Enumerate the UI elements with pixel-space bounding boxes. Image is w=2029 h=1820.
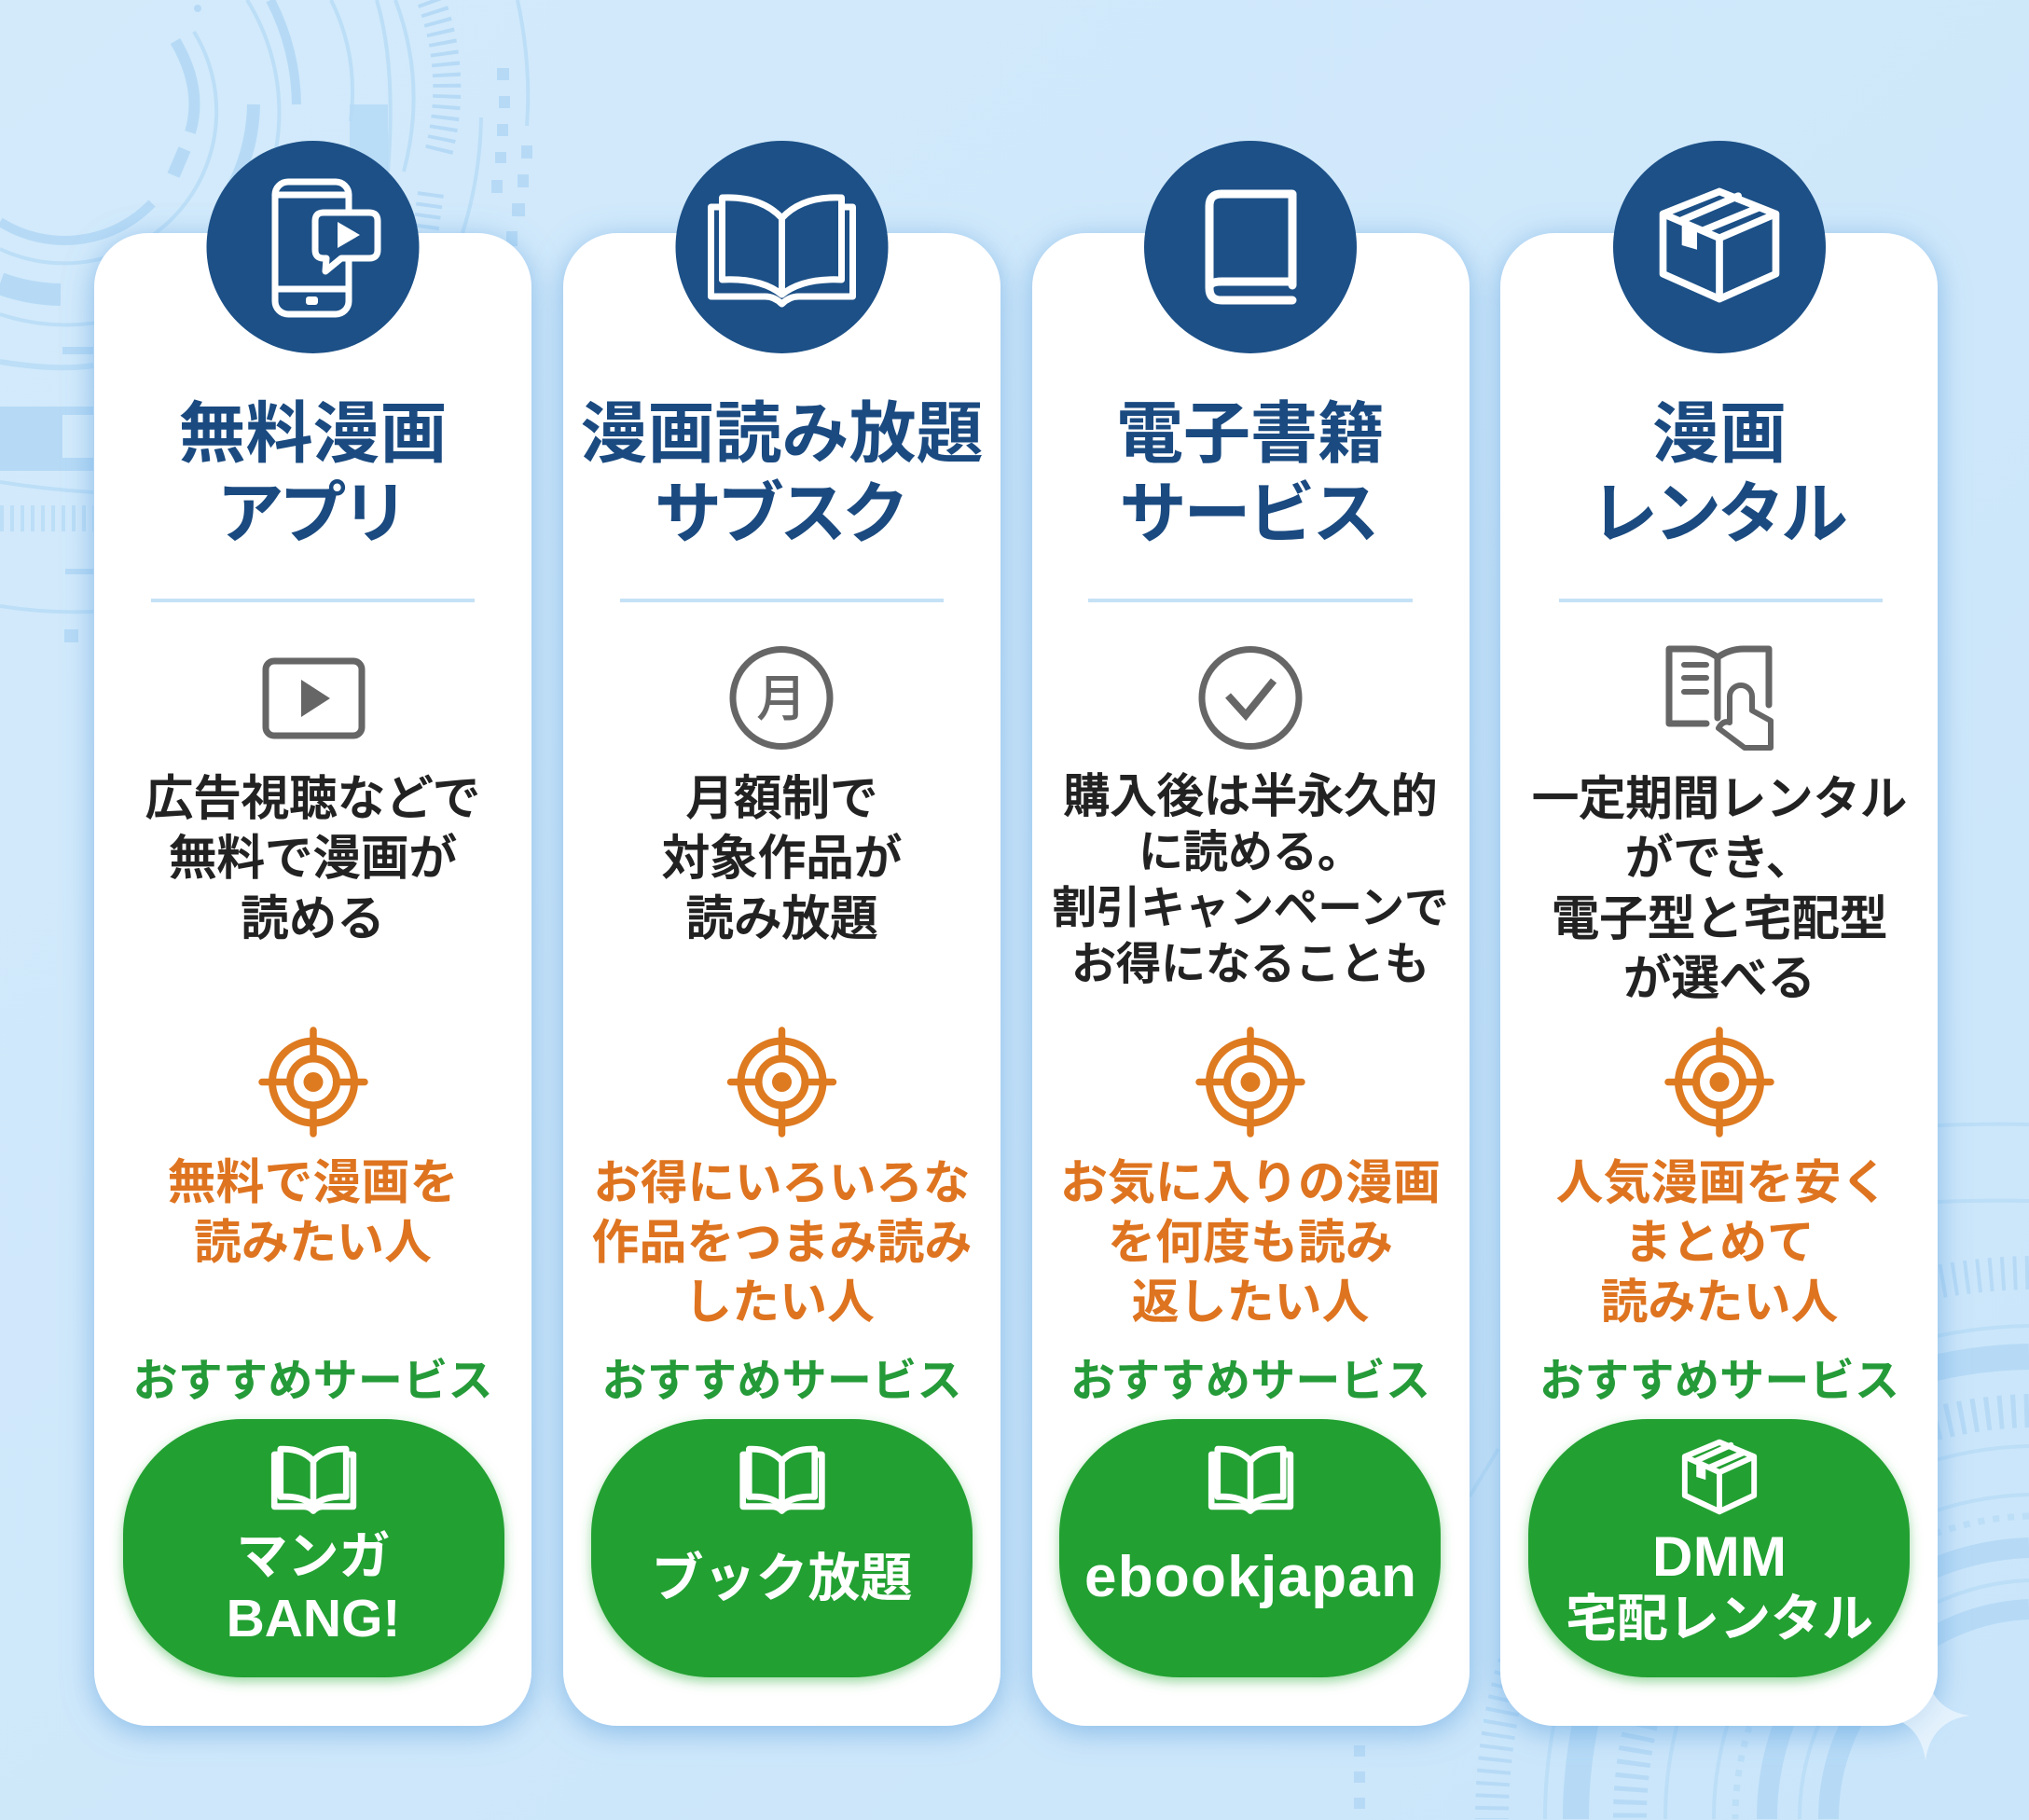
description: 読める <box>241 891 385 945</box>
heading: 電子書籍 <box>1116 397 1385 472</box>
panel: 漫画読み放題サブスク <box>563 141 1001 1726</box>
icon: sparkle <box>1882 1670 1969 1760</box>
heading <box>178 397 448 552</box>
recommended label: おすすめサービス <box>132 1357 492 1406</box>
description <box>662 771 902 945</box>
target audience: まとめて <box>1624 1216 1815 1269</box>
description: 割引キャンペーンで <box>1052 884 1449 933</box>
description: 読み放題 <box>685 891 878 945</box>
button: ブック放題 <box>591 1419 973 1677</box>
target audience: 読みたい人 <box>194 1216 432 1269</box>
background pattern: top-left tech arcs <box>0 0 532 642</box>
icon: box <box>1685 1442 1754 1511</box>
icon: target <box>1199 1030 1302 1134</box>
icon: book <box>1211 1449 1291 1510</box>
icon: book <box>743 1449 821 1510</box>
recommended label: おすすめサービス <box>602 1357 962 1406</box>
description: に読める。 <box>1139 828 1362 877</box>
icon: target <box>262 1030 365 1134</box>
icon: monthly <box>733 649 830 746</box>
description: お得になることも <box>1071 940 1429 989</box>
heading <box>1591 397 1846 552</box>
target audience: 無料で漫画を <box>167 1156 459 1210</box>
description: 無料で漫画が <box>169 831 457 885</box>
icon: book with pointing hand <box>1669 649 1771 748</box>
description: 一定期間レンタル <box>1532 772 1907 825</box>
icon: monthly: 月 <box>756 671 807 727</box>
icon: target <box>1668 1030 1771 1134</box>
icon: closed book <box>1144 141 1357 353</box>
button: DMM宅配レンタル: 宅配レンタル <box>1566 1590 1873 1648</box>
heading <box>1116 397 1385 552</box>
target audience <box>1060 1156 1441 1329</box>
button: マンガBANG!: BANG! <box>227 1589 400 1648</box>
button: ebookjapan <box>1059 1419 1441 1677</box>
description: 購入後は半永久的 <box>1063 770 1438 822</box>
card background <box>1032 233 1470 1726</box>
recommended label: おすすめサービス <box>1539 1357 1899 1406</box>
target audience: を何度も読み <box>1108 1216 1393 1269</box>
icon: check <box>1202 649 1299 746</box>
description: 広告視聴などで <box>145 771 480 825</box>
description: ができ、 <box>1625 831 1814 885</box>
button: ebookjapan: ebookjapan <box>1084 1545 1416 1609</box>
panel: 漫画レンタル <box>1500 141 1938 1726</box>
panel: 電子書籍サービス <box>1032 141 1470 1726</box>
icon: book <box>274 1449 353 1510</box>
target audience: 読みたい人 <box>1600 1275 1839 1329</box>
heading <box>580 397 984 552</box>
target audience <box>1555 1156 1889 1329</box>
button: マンガBANG! <box>123 1419 504 1677</box>
target audience <box>591 1156 973 1329</box>
icon: phone with video bubble <box>207 141 420 353</box>
description: が選べる <box>1623 951 1815 1005</box>
description <box>145 771 480 945</box>
panel: 無料漫画アプリ <box>94 141 531 1726</box>
target audience: したい人 <box>684 1275 875 1329</box>
target audience <box>167 1156 459 1269</box>
recommended label: おすすめサービス <box>1070 1357 1430 1406</box>
button: DMM宅配レンタル <box>1528 1419 1910 1677</box>
description: 電子型と宅配型 <box>1552 891 1887 945</box>
card background <box>563 233 1001 1726</box>
description <box>1052 770 1449 989</box>
target audience: 人気漫画を安く <box>1555 1156 1889 1209</box>
icon: video play <box>266 661 362 736</box>
description: 月額制で <box>685 771 878 825</box>
icon: open book <box>675 141 888 353</box>
heading: 無料漫画 <box>178 397 448 472</box>
button: マンガBANG!: マンガ <box>236 1527 391 1585</box>
heading: 漫画読み放題 <box>580 397 984 472</box>
description: 対象作品が <box>662 831 902 885</box>
background pattern: bottom-right tech arcs <box>1354 1124 2029 1819</box>
heading: サブスク <box>655 477 904 552</box>
heading: サービス <box>1119 477 1377 552</box>
description <box>1532 772 1907 1005</box>
heading: アプリ <box>216 477 405 552</box>
heading: レンタル <box>1591 477 1846 552</box>
button: DMM宅配レンタル: DMM <box>1652 1525 1787 1588</box>
icon: target <box>731 1030 834 1134</box>
target audience: 作品をつまみ読み <box>591 1216 973 1269</box>
target audience: 返したい人 <box>1131 1275 1370 1329</box>
button: ブック放題: ブック放題 <box>651 1549 912 1607</box>
card background <box>94 233 531 1726</box>
icon: parcel box <box>1613 141 1826 353</box>
target audience: お得にいろいろな <box>593 1156 970 1209</box>
heading: 漫画 <box>1652 397 1787 472</box>
target audience: お気に入りの漫画 <box>1060 1156 1441 1209</box>
card background <box>1500 233 1938 1726</box>
